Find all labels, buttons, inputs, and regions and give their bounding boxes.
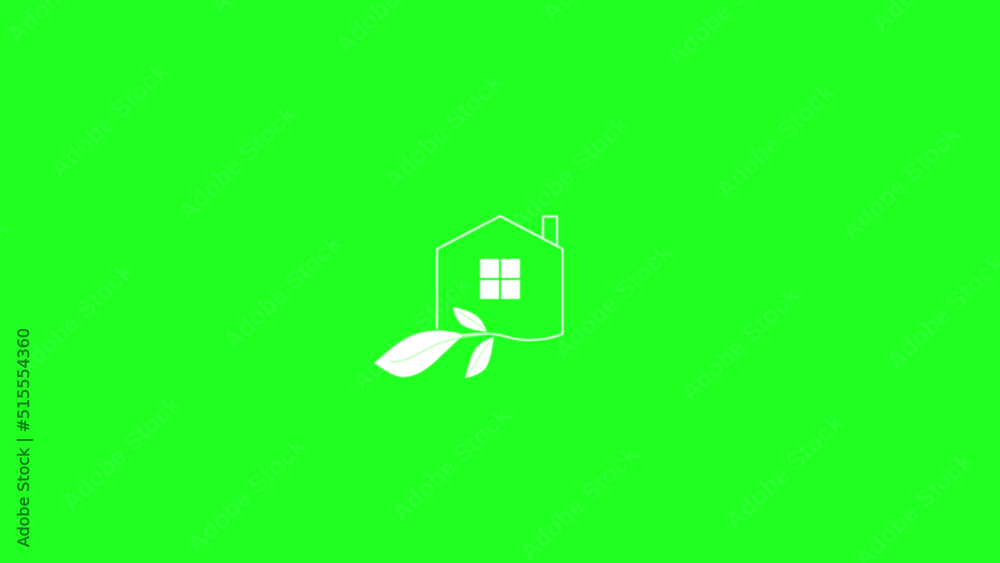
watermark pattern: Adobe Stock [347, 270, 476, 396]
large leaf [374, 331, 464, 377]
watermark pattern: Adobe Stock [549, 238, 678, 364]
watermark pattern: Adobe Stock [379, 68, 508, 194]
watermark pattern: Adobe Stock [45, 57, 174, 183]
top leaf [453, 307, 487, 332]
watermark pattern: Adobe Stock [676, 281, 805, 407]
watermark pattern: Adobe Stock [720, 409, 849, 535]
top leaf vein [457, 311, 487, 332]
watermark pattern: Adobe Stock [182, 432, 311, 558]
lower leaf [465, 337, 494, 378]
icon: house with leaves [374, 216, 562, 378]
watermark pattern: Adobe Stock [173, 100, 302, 226]
watermark pattern: Adobe Stock [837, 120, 966, 246]
watermark pattern: Adobe Stock [515, 440, 644, 563]
window [480, 259, 520, 299]
lower leaf vein [468, 338, 493, 376]
watermark pattern: Adobe Stock [10, 257, 139, 383]
large leaf vein [390, 334, 493, 362]
watermark pattern: Adobe Stock [711, 78, 840, 204]
house outline [437, 216, 562, 340]
watermark pattern: Adobe Stock [218, 229, 347, 355]
vertical stock id text: Adobe Stock | #515554360 [14, 328, 33, 547]
watermark pattern: Adobe Stock [57, 390, 186, 516]
watermark pattern: Adobe Stock [505, 110, 634, 236]
watermark pattern: Adobe Stock [387, 401, 516, 527]
